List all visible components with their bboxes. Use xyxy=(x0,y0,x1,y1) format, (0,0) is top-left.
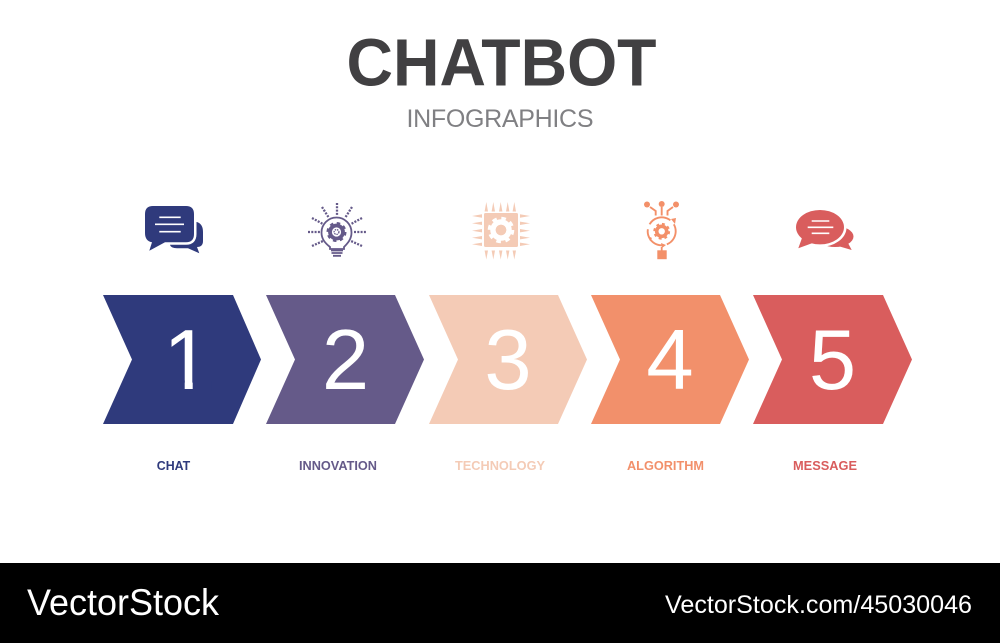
footer url: VectorStock.com/45030046 xyxy=(665,591,972,619)
icon: message bubbles xyxy=(796,210,854,250)
chevron 3 xyxy=(429,295,587,424)
chevron 5 xyxy=(753,295,912,424)
label: message: MESSAGE xyxy=(793,459,857,473)
icon: processor chip with gear xyxy=(472,202,530,260)
chevron 3: 3 xyxy=(484,313,532,408)
chevron 2 xyxy=(266,295,424,424)
icon: chat bubbles xyxy=(145,206,203,253)
icon: algorithm gear xyxy=(643,201,681,259)
chevron 4 xyxy=(591,295,749,424)
icon: light bulb with gear xyxy=(308,203,366,256)
chevron 1 xyxy=(103,295,261,424)
title: CHATBOT xyxy=(346,26,657,100)
subtitle: INFOGRAPHICS xyxy=(406,105,594,133)
chevron 5: 5 xyxy=(809,313,856,408)
footer bar xyxy=(0,563,1000,643)
label: technology: TECHNOLOGY xyxy=(455,459,546,473)
chevron 1: 1 xyxy=(163,313,211,408)
chevron 4: 4 xyxy=(646,313,694,408)
footer logo: VectorStock xyxy=(27,582,219,623)
chevron 2: 2 xyxy=(322,313,369,408)
label: innovation: INNOVATION xyxy=(299,459,377,473)
label: algorithm: ALGORITHM xyxy=(627,459,704,473)
label: chat: CHAT xyxy=(157,459,191,473)
